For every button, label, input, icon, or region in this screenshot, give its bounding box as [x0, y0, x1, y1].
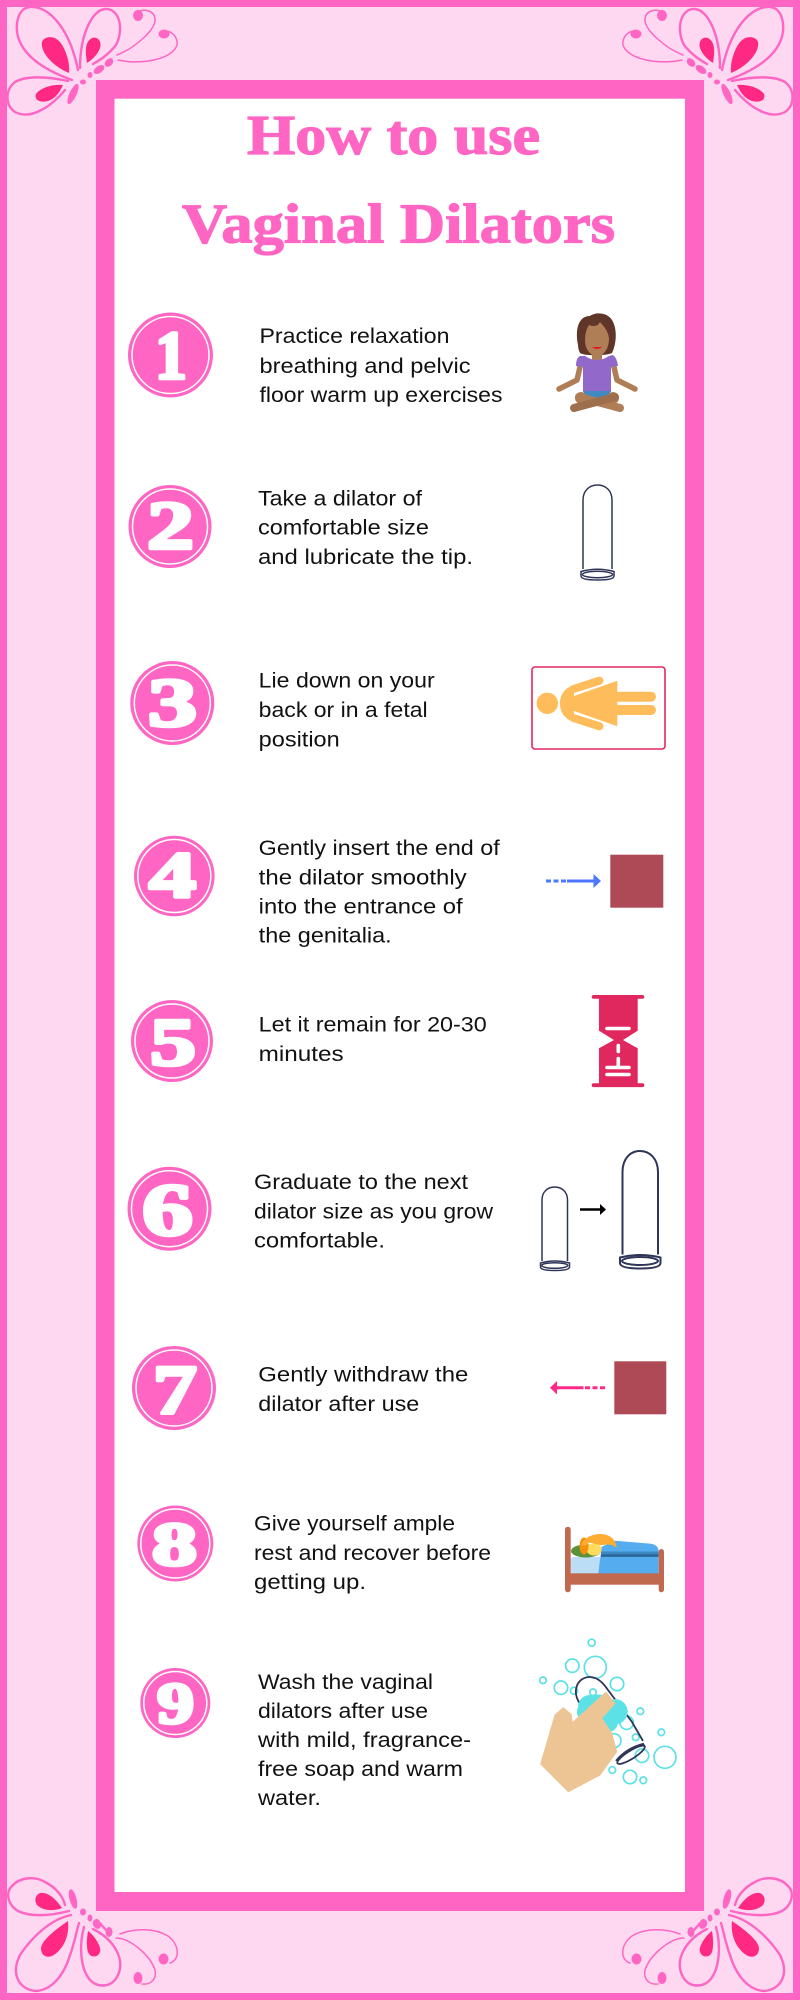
number badge 7: 7	[153, 1352, 197, 1429]
butterfly: top left	[8, 7, 177, 115]
icon: maroon square	[614, 1361, 666, 1414]
step 8 text: Give yourself ample	[254, 1513, 455, 1536]
step 3 text: Lie down on your	[259, 670, 435, 693]
number badge 4: 4	[149, 839, 196, 912]
step 1 text: floor warm up exercises	[260, 384, 502, 407]
icon: dilator	[581, 485, 614, 580]
step 9 text	[257, 1671, 471, 1810]
butterfly: bottom left	[8, 1878, 177, 1991]
step 3 text	[259, 670, 435, 751]
title	[182, 105, 615, 256]
step 5 text	[259, 1014, 487, 1066]
step 8 text	[254, 1513, 491, 1594]
step 6 text	[254, 1171, 494, 1252]
step 6 text: comfortable.	[254, 1229, 385, 1252]
number badge 1: 1	[155, 318, 187, 394]
icon: maroon square	[610, 855, 663, 908]
icon: hand washing dilator with soap bubbles	[540, 1639, 676, 1792]
icon: large dilator	[620, 1151, 660, 1268]
step 9 text: Wash the vaginal	[258, 1671, 433, 1694]
number badge 2	[128, 485, 212, 568]
step 9	[140, 1639, 676, 1810]
step 3 text: back or in a fetal	[259, 699, 428, 722]
step 1	[128, 312, 635, 408]
butterfly: top right	[623, 7, 792, 115]
step 9 text: water.	[257, 1787, 321, 1810]
number badge 3	[130, 661, 214, 745]
step 8 text: getting up.	[254, 1571, 366, 1594]
step 8	[137, 1506, 664, 1594]
icon: small dilator	[540, 1187, 570, 1270]
number badge 9	[140, 1668, 210, 1738]
step 7 text	[258, 1364, 468, 1416]
number badge 9: 9	[157, 1671, 194, 1736]
title: How to use	[247, 105, 540, 167]
step 3	[130, 661, 665, 751]
number badge 1	[128, 312, 213, 398]
step 7	[132, 1346, 666, 1430]
number badge 8	[137, 1506, 213, 1582]
step 4 text: the dilator smoothly	[259, 866, 467, 889]
step 4 text: into the entrance of	[259, 895, 463, 918]
number badge 7	[132, 1346, 216, 1430]
step 1 text: Practice relaxation	[260, 325, 450, 348]
number badge 6: 6	[142, 1170, 193, 1252]
step 2 text: and lubricate the tip.	[258, 546, 473, 569]
step 6	[128, 1151, 660, 1270]
arrow: withdraw, dashed pink	[550, 1381, 605, 1394]
step 4 text: the genitalia.	[259, 924, 392, 947]
title: Vaginal Dilators	[182, 194, 615, 256]
number badge 3: 3	[148, 665, 197, 741]
icon: person lying down in framed box	[532, 667, 665, 749]
icon: meditating woman	[559, 313, 635, 408]
number badge 5	[131, 1000, 213, 1082]
number badge 8: 8	[152, 1512, 197, 1579]
panel: main white card with pink frame	[96, 80, 704, 1911]
step 9 text: dilators after use	[258, 1700, 428, 1723]
step 5 text: minutes	[259, 1043, 344, 1066]
arrow: black right arrow	[580, 1204, 606, 1215]
step 5 text: Let it remain for 20-30	[259, 1014, 487, 1037]
icon: person resting in bed	[565, 1527, 664, 1592]
step 1 text	[260, 325, 502, 407]
step 4	[134, 836, 663, 947]
step 9 text: with mild, fragrance-	[257, 1729, 471, 1752]
step 4 text	[259, 837, 500, 947]
step 2 text	[258, 488, 473, 569]
step 6 text: dilator size as you grow	[254, 1200, 494, 1223]
icon: hourglass	[592, 995, 644, 1087]
step 9 text: free soap and warm	[258, 1758, 463, 1781]
step 2 text: comfortable size	[258, 517, 429, 540]
number badge 2: 2	[147, 488, 194, 564]
arrow: insert, dashed blue	[546, 874, 601, 888]
step 2 text: Take a dilator of	[258, 488, 422, 510]
step 5	[131, 995, 644, 1087]
number badge 4	[134, 836, 215, 916]
step 4 text: Gently insert the end of	[259, 837, 500, 860]
step 7 text: dilator after use	[258, 1393, 419, 1416]
step 8 text: rest and recover before	[254, 1542, 491, 1565]
step 2	[128, 485, 614, 580]
step 7 text: Gently withdraw the	[258, 1364, 468, 1387]
step 3 text: position	[259, 728, 340, 751]
number badge 5: 5	[150, 1004, 196, 1080]
number badge 6	[128, 1167, 212, 1252]
step 1 text: breathing and pelvic	[260, 355, 470, 378]
butterfly: bottom right	[623, 1878, 792, 1991]
step 6 text: Graduate to the next	[254, 1171, 468, 1194]
